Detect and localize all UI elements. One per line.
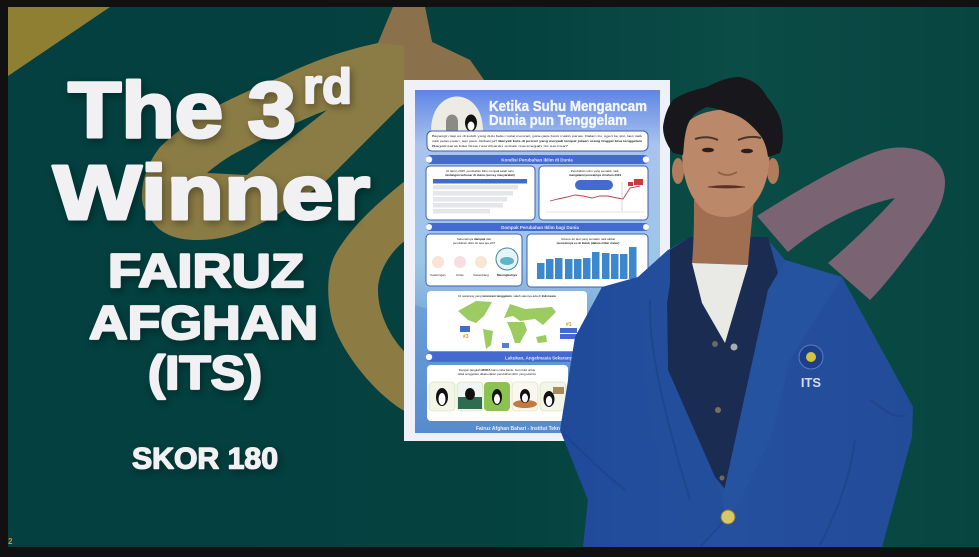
- poster: [404, 80, 670, 441]
- card: penguin 2: [457, 382, 483, 411]
- decorative ribbon: mauve ring: [757, 147, 945, 300]
- gold button: [721, 510, 735, 524]
- section bar: langkah: [426, 352, 606, 362]
- panel: dampak icons: Kekeringan: [430, 273, 446, 277]
- winner name: AFGHAN: [89, 296, 318, 349]
- panel: world map: #1: [566, 322, 572, 328]
- panel: survey bars: tantangan terbesar di dunia (survey masyarakat): [445, 173, 515, 177]
- card: penguin 4: [512, 382, 538, 411]
- eyebrows: [695, 137, 761, 140]
- panel: langkah penguins: tidak tenggelam dikarenakan perubahan iklim yang ekstrim: [458, 372, 537, 376]
- poster title: [489, 99, 647, 129]
- eyes: [702, 148, 753, 153]
- decorative ribbon: tan loop: [142, 7, 484, 240]
- hair: [663, 77, 783, 157]
- neck: [692, 200, 754, 265]
- panel: langkah penguins: [427, 365, 568, 421]
- poster title: Dunia pun Tenggelam: [489, 113, 627, 129]
- decorative ribbon: olive corner: [8, 7, 110, 76]
- winner name: (ITS): [148, 346, 262, 399]
- section bar: kondisi: Kondisi Perubahan Iklim di Dunia: [501, 158, 573, 162]
- score: SKOR 180: [132, 442, 278, 476]
- heading: The 3rd Winner: The 3: [68, 65, 296, 154]
- jacket left lapel: [638, 250, 725, 547]
- section bar: dampak: Dampak Perubahan Iklim bagi Dunia: [501, 225, 579, 230]
- ear left: [672, 158, 684, 184]
- winner name: [89, 244, 318, 399]
- icon: ITS logo: ITS: [801, 375, 821, 390]
- icon: penguin: [465, 114, 477, 132]
- page number: 2: [8, 537, 13, 546]
- jacket: [560, 237, 913, 547]
- nose: [718, 172, 737, 175]
- panel: world map: Di sekarang yang terancam tenggelam, salah satunya ada di Indonesia: [458, 294, 556, 298]
- poster paper: [404, 80, 670, 441]
- heading: The 3rd Winner: [53, 60, 370, 236]
- icon: ITS logo: [799, 345, 823, 390]
- white t-shirt: [692, 263, 748, 343]
- panel: world map: #3: [463, 334, 469, 340]
- panel: dampak icons: [426, 234, 522, 286]
- card: penguin 5: [540, 382, 566, 411]
- intro box: [427, 131, 648, 151]
- denim buttons: [712, 341, 738, 480]
- panel: sea level bar chart: mencairnya es di kutub (dalam miliar meter): [557, 241, 619, 245]
- panel: line chart temperature: Perubahan suhu yang semakin naik,: [571, 169, 619, 173]
- panel: survey bars: [426, 166, 535, 220]
- panel: survey bars: Di tahun 2025, perubahan iklim menjadi salah satu: [446, 169, 514, 173]
- panel: dampak icons: perubahan iklim itu apa aja sih?: [453, 241, 495, 245]
- ear right: [767, 158, 779, 184]
- decorative ribbon: lower tan arc: [328, 180, 406, 412]
- panel: dampak icons: Sebenarnya dampak dari: [457, 237, 491, 241]
- person: [560, 77, 913, 547]
- poster title: Ketika Suhu Mengancam: [489, 99, 647, 115]
- mouth: [708, 186, 745, 188]
- intro box: Bagaimana kita bisa membantu untuk mencegah ini semua?: [432, 144, 569, 148]
- poster decorative waves: [415, 305, 660, 433]
- panel: langkah penguins: Dengan langkah MUDA kami coba bantu, bumi kita untuk: [459, 368, 536, 372]
- jacket fold shadows: [562, 300, 905, 547]
- panel: dampak icons: Krisis: [456, 273, 464, 277]
- jacket right lapel: [722, 260, 842, 520]
- intro box: Bayangin tiap es di kutub yang dulu beku mulai mencair, gara-gara bumi makin panas. Dalam itu, ngeri ke sisi, laut naik: [432, 134, 643, 138]
- section bar: dampak: [426, 223, 649, 231]
- section bar: langkah: Lakukan, Angelmasia Sekarang!: [505, 356, 574, 360]
- intro box: naik pelan-pelan, tapi pasti. Akibatnya? Banyak kota di pesisir yang menjadi tempat jutaan orang tinggal bisa tenggelam: [432, 139, 642, 143]
- heading: The 3rd Winner: Winner: [53, 150, 370, 236]
- card: penguin 1: [429, 382, 455, 411]
- icon: igloo: [431, 96, 483, 132]
- panel: dampak icons: Meningkatnya: [497, 273, 517, 277]
- panel: world map: [427, 291, 587, 351]
- winner name: FAIRUZ: [108, 244, 304, 297]
- panel: line chart temperature: mengalami puncaknya di tahun 2024: [569, 173, 621, 177]
- panel: dampak icons: Gelombang: [473, 273, 489, 277]
- decorative ribbon: top brown tint: [378, 7, 484, 90]
- poster background: [415, 90, 660, 433]
- heading: The 3rd Winner: rd: [303, 60, 352, 114]
- panel: sea level bar chart: [527, 234, 648, 287]
- poster footer: Fairuz Afghan Bahari - Institut Teknologi: [476, 426, 572, 432]
- denim shirt: [667, 237, 778, 493]
- panel: line chart temperature: [539, 166, 648, 220]
- face: [682, 109, 769, 217]
- card: penguin 3: [484, 382, 510, 411]
- section bar: kondisi: [426, 155, 649, 164]
- panel: sea level bar chart: Volume air laut yang semakin naik akibat: [561, 237, 615, 241]
